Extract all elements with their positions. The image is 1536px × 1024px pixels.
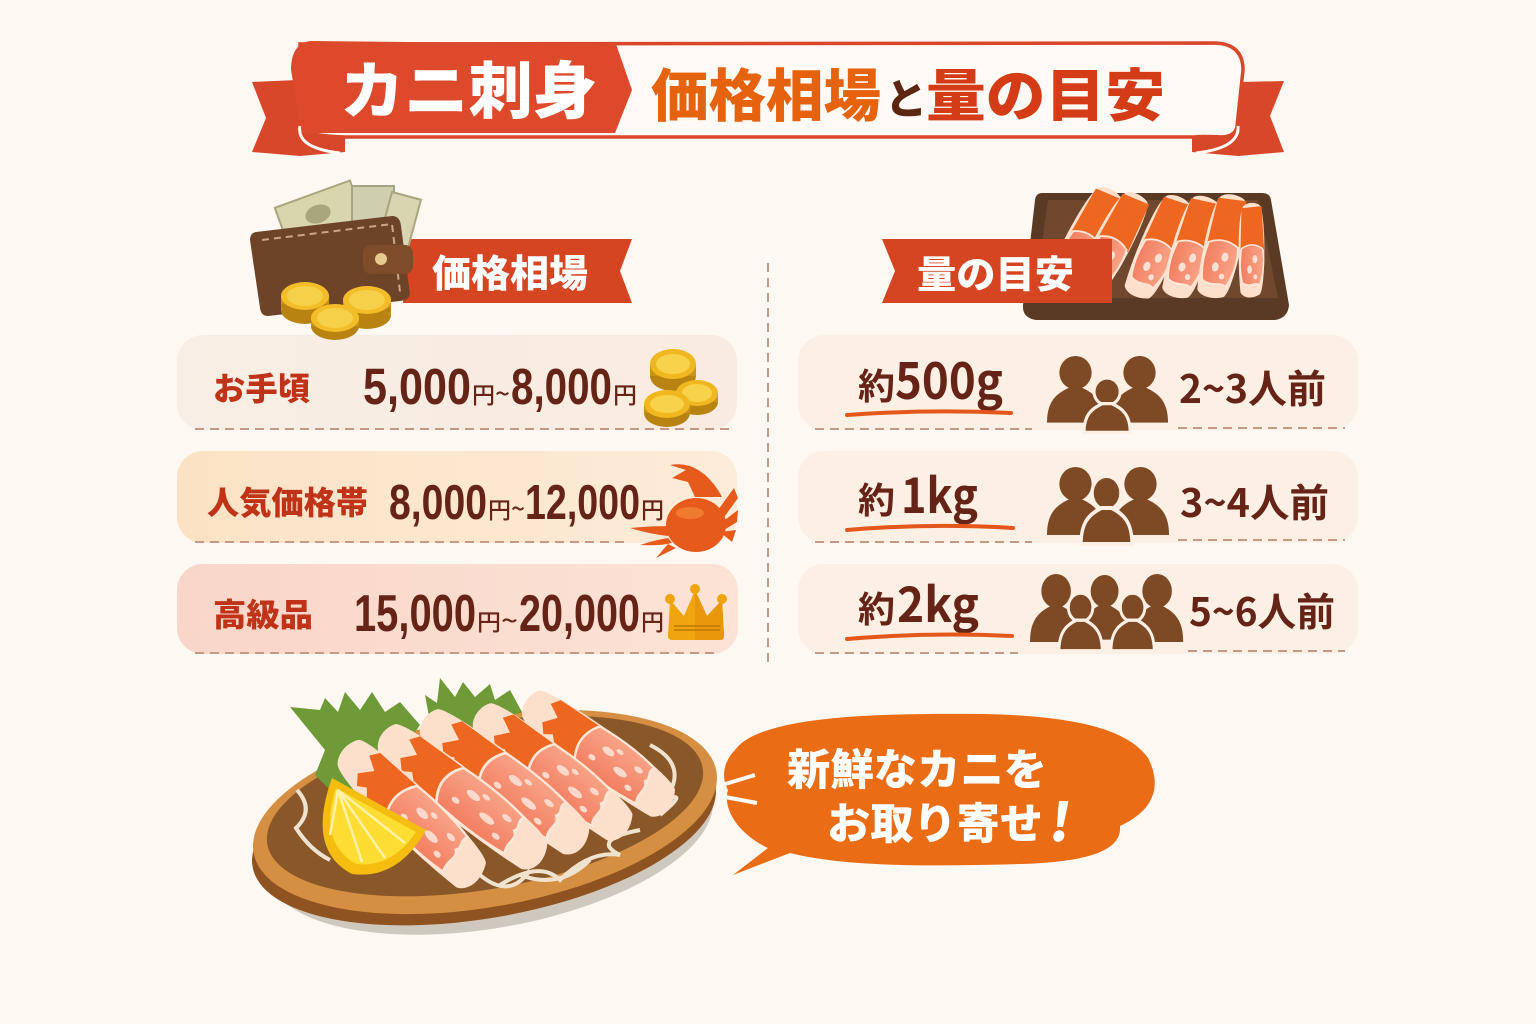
icon: gold coins xyxy=(644,349,718,427)
coins xyxy=(281,288,329,324)
callout: speech bubble xyxy=(722,714,1155,875)
panel: 2kg row xyxy=(798,564,1358,654)
panel: premium price row xyxy=(177,564,738,654)
price: 5,000 to 8,000 yen: 円 xyxy=(472,376,495,410)
icon: tray of crab legs xyxy=(1023,181,1289,320)
panel: 500g row xyxy=(798,335,1358,432)
wallet clasp xyxy=(363,245,413,274)
price: 15,000 to 20,000 yen: 円 xyxy=(641,603,664,637)
price: 8,000 to 12,000 yen: 円 xyxy=(641,491,664,525)
amount: 1kg: 1kg xyxy=(901,457,978,527)
bubble text line 2: お取り寄せ xyxy=(827,790,1043,852)
title: kani sashimi: カニ刺身 xyxy=(340,41,597,131)
bubble emphasis ticks xyxy=(722,775,757,803)
price: 8,000 to 12,000 yen xyxy=(389,476,664,530)
wallet body xyxy=(250,216,410,316)
title ribbon xyxy=(252,41,1284,156)
title: to: と xyxy=(885,66,927,127)
servings: 5 to 6 people: 5~6人前 xyxy=(1189,582,1335,638)
amount: 1kg: 約 xyxy=(858,472,895,524)
section heading: quantity guide: 量の目安 xyxy=(917,244,1074,299)
amount: 500g: 500g xyxy=(895,342,1003,414)
bills xyxy=(275,180,421,255)
icon: crab xyxy=(630,464,738,558)
underline xyxy=(847,526,1013,530)
price: 8,000 to 12,000 yen: 12,000 xyxy=(525,476,640,530)
price: 15,000 to 20,000 yen: 15,000 xyxy=(354,585,476,643)
price: 15,000 to 20,000 yen xyxy=(354,585,664,643)
ribbon white body xyxy=(300,43,1243,137)
panel: budget price row xyxy=(177,335,737,430)
illustration: crab sashimi plate xyxy=(237,678,733,966)
icon: wallet with money and coins xyxy=(250,180,421,340)
underline xyxy=(847,411,1011,415)
plate shadow xyxy=(251,706,729,966)
center divider xyxy=(767,263,769,668)
icon: three people, larger xyxy=(1047,467,1169,544)
ribbon right tail xyxy=(1192,81,1284,156)
price: 15,000 to 20,000 yen: 20,000 xyxy=(519,585,640,643)
plate side xyxy=(237,695,731,957)
section heading: price range xyxy=(403,239,632,303)
section heading: price range: 価格相場 xyxy=(432,243,588,298)
crab legs xyxy=(326,681,685,897)
ribbon fold curls xyxy=(300,126,1238,153)
icon: three people xyxy=(1047,356,1168,432)
ribbon left tail xyxy=(252,80,345,156)
label: budget: お手頃 xyxy=(213,364,310,410)
amount: 500g: 約 xyxy=(858,358,895,410)
shiso leaves xyxy=(290,678,522,800)
section heading: quantity guide xyxy=(882,239,1112,303)
bubble shape xyxy=(724,714,1155,875)
price: 8,000 to 12,000 yen: 8,000 xyxy=(389,476,487,530)
amount: 2kg: 約 xyxy=(858,581,895,633)
price: 15,000 to 20,000 yen: ~ xyxy=(501,602,518,636)
price: 5,000 to 8,000 yen: 8,000 xyxy=(511,358,612,415)
ribbon red panel xyxy=(291,41,632,133)
amount: 1kg xyxy=(858,457,978,527)
wallet stitching xyxy=(262,224,400,292)
price: 5,000 to 8,000 yen: 5,000 xyxy=(363,358,471,415)
lemon wedge xyxy=(323,778,426,875)
price: 8,000 to 12,000 yen: 円 xyxy=(488,491,511,525)
tray xyxy=(1023,193,1289,320)
plate rim xyxy=(237,678,733,946)
underline xyxy=(847,635,1012,639)
price: 5,000 to 8,000 yen xyxy=(363,358,637,415)
panel: 1kg row xyxy=(798,451,1358,544)
servings: 3 to 4 people: 3~4人前 xyxy=(1180,473,1329,529)
price: 5,000 to 8,000 yen: 円 xyxy=(613,376,637,410)
crab legs in tray xyxy=(1042,181,1264,304)
servings: 2 to 3 people: 2~3人前 xyxy=(1179,359,1326,415)
amount: 500g xyxy=(858,342,1003,414)
daikon garnish xyxy=(296,745,676,886)
price: 15,000 to 20,000 yen: 円 xyxy=(477,603,501,637)
plate surface xyxy=(253,686,717,926)
bubble text line 1: 新鮮なカニを xyxy=(787,736,1047,798)
bubble text line 2: ! xyxy=(1046,781,1077,857)
icon: five people xyxy=(1030,574,1183,651)
label: popular price range: 人気価格帯 xyxy=(207,478,368,524)
title: quantity guide: 量の目安 xyxy=(926,51,1165,133)
amount: 2kg: 2kg xyxy=(897,566,979,636)
price: 8,000 to 12,000 yen: ~ xyxy=(511,490,525,524)
label: premium: 高級品 xyxy=(213,590,313,636)
price: 5,000 to 8,000 yen: ~ xyxy=(495,375,510,409)
title: price range: 価格相場 xyxy=(651,51,881,133)
amount: 2kg xyxy=(858,566,979,636)
icon: crown xyxy=(665,584,727,640)
panel: popular price row xyxy=(177,451,738,558)
